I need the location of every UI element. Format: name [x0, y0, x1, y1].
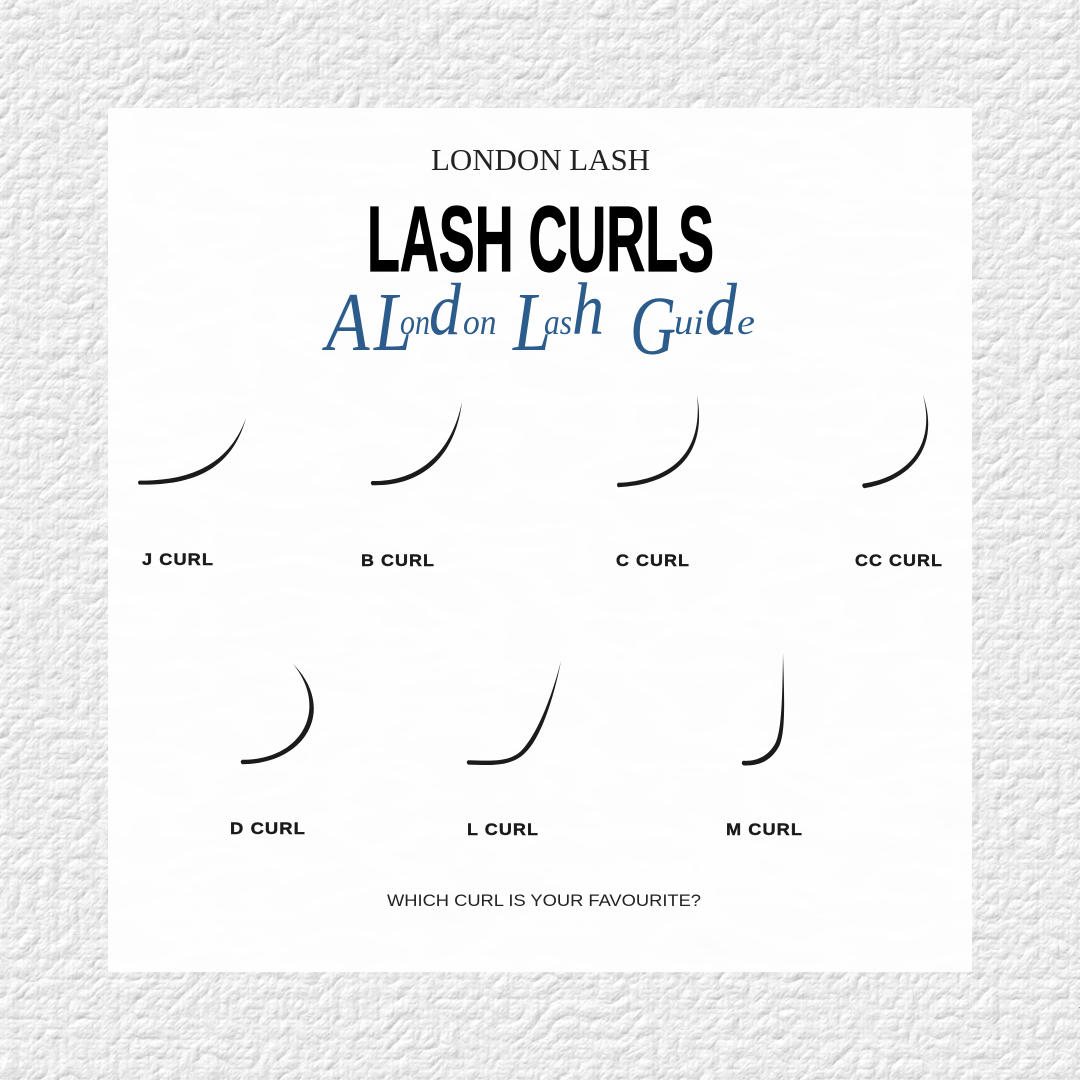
curl: CC curl: [855, 395, 943, 570]
label: M curl: M CURL: [726, 820, 803, 839]
lash: J curve: [138, 418, 246, 485]
curl: J curl: [138, 418, 246, 569]
label: C curl: C CURL: [616, 551, 690, 570]
subtitle: A London Lash Guide: on: [400, 302, 430, 342]
lash: C curve: [617, 395, 699, 487]
curl: L curl: [467, 661, 561, 839]
subtitle: A London Lash Guide: L: [373, 276, 412, 369]
subtitle: A London Lash Guide: d: [705, 269, 738, 351]
label: J curl: J CURL: [142, 550, 214, 569]
subtitle: A London Lash Guide: ui: [674, 302, 704, 342]
label: L curl: L CURL: [467, 820, 539, 839]
lash: D curve: [241, 664, 314, 764]
title: Lash Curls: LASH CURLS: [367, 187, 714, 291]
subtitle: A London Lash Guide: on: [463, 302, 505, 342]
lash: L curve: [467, 661, 561, 765]
curl: M curl: [726, 653, 803, 839]
call to action question: WHICH CURL IS YOUR FAVOURITE?: [387, 891, 701, 910]
lash: CC curve: [862, 395, 928, 488]
lash: M curve: [742, 653, 784, 766]
subtitle: A London Lash Guide: A: [322, 276, 386, 369]
label: D curl: D CURL: [230, 819, 306, 838]
subtitle: A London Lash Guide: d: [429, 269, 462, 351]
curl: C curl: [616, 395, 699, 570]
label: B curl: B CURL: [361, 551, 435, 570]
subtitle: A London Lash Guide: h: [572, 269, 620, 351]
subtitle: A London Lash Guide: e: [737, 302, 755, 342]
logo: London Lash wordmark: LONDON LASH: [431, 142, 650, 177]
lash: B curve: [371, 402, 462, 485]
label: CC curl: CC CURL: [855, 551, 943, 570]
subtitle: A London Lash Guide: G: [630, 280, 676, 373]
curl: D curl: [230, 664, 314, 838]
subtitle: A London Lash Guide: as: [544, 302, 572, 342]
subtitle: A London Lash Guide: L: [512, 276, 551, 369]
panel: white guide card: [108, 108, 972, 972]
curl: B curl: [361, 402, 462, 570]
